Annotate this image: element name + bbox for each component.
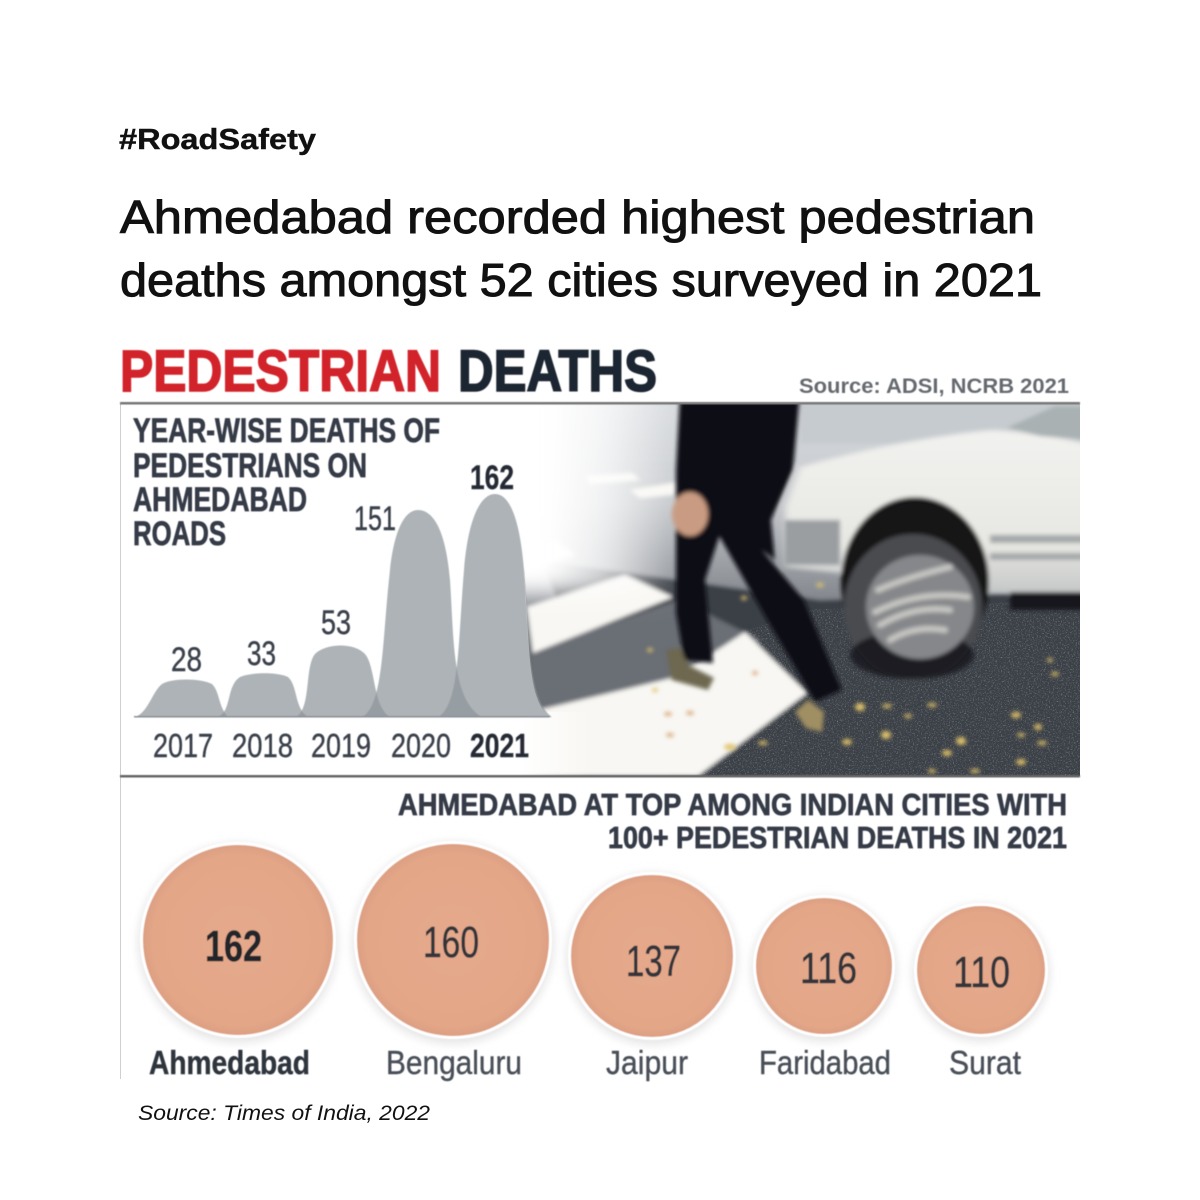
year labels: 2018 xyxy=(232,727,293,764)
white fade of lower stripe xyxy=(520,718,568,776)
city labels: Faridabad xyxy=(759,1044,891,1081)
circle: Faridabad: 116 xyxy=(800,944,857,993)
chart heading: AHMEDABAD xyxy=(133,481,307,519)
circle: Ahmedabad xyxy=(140,842,336,1038)
top rule xyxy=(120,402,1080,404)
circle: Surat: 110 xyxy=(953,948,1010,997)
circle: Jaipur xyxy=(568,872,736,1040)
bottom rule xyxy=(120,775,1080,778)
title xyxy=(120,191,1042,306)
city labels xyxy=(149,1044,1021,1081)
hashtag: #RoadSafety xyxy=(119,124,316,156)
year labels: 2021 xyxy=(470,727,529,764)
cities heading xyxy=(398,787,1067,855)
city labels: Jaipur xyxy=(606,1044,688,1081)
circle: Surat xyxy=(914,903,1048,1037)
chart heading: YEAR-WISE DEATHS OF xyxy=(133,412,440,450)
circle halos xyxy=(139,843,1049,1044)
city labels: Bengaluru xyxy=(386,1044,522,1081)
circle: Jaipur: 137 xyxy=(626,937,681,986)
circle: Bengaluru xyxy=(354,841,552,1039)
chart baseline xyxy=(134,716,550,718)
hump 2018 xyxy=(218,673,308,717)
main heading xyxy=(120,339,657,404)
chart heading: PEDESTRIANS ON xyxy=(133,447,367,485)
photo: pedestrian and car xyxy=(524,404,1080,776)
road grain xyxy=(680,600,1080,776)
value labels: 33 xyxy=(247,635,276,673)
year labels: 2017 xyxy=(153,727,213,764)
year labels: 2019 xyxy=(311,727,371,764)
value labels: 53 xyxy=(321,604,351,642)
hump 2020 xyxy=(362,510,482,717)
title: deaths amongst 52 cities surveyed in 2021 xyxy=(120,254,1042,306)
spokes xyxy=(875,567,968,640)
car underside shadow xyxy=(1010,592,1090,610)
wheel arch xyxy=(838,494,992,617)
city labels: Ahmedabad xyxy=(149,1044,310,1081)
value labels: 28 xyxy=(171,641,202,679)
chart heading: ROADS xyxy=(133,515,226,553)
circle: Ahmedabad: 162 xyxy=(205,922,262,971)
car windshield xyxy=(1010,405,1080,440)
hump chart xyxy=(134,494,552,718)
value labels: 151 xyxy=(354,500,396,538)
left shoe xyxy=(666,648,714,690)
main heading: DEATHS xyxy=(458,339,657,404)
crosswalk stripes xyxy=(510,473,807,776)
person torso and legs xyxy=(676,394,842,702)
left edge line xyxy=(120,404,121,1079)
value labels xyxy=(171,459,514,679)
hump 2017 xyxy=(135,680,228,717)
cities heading: AHMEDABAD AT TOP AMONG INDIAN CITIES WITH xyxy=(398,787,1067,822)
city labels: Surat xyxy=(949,1044,1021,1081)
infographic image panel xyxy=(120,339,1090,1081)
title: Ahmedabad recorded highest pedestrian xyxy=(120,191,1035,243)
cities heading: 100+ PEDESTRIAN DEATHS IN 2021 xyxy=(608,820,1067,855)
white fade of photo xyxy=(520,404,675,608)
car body xyxy=(785,430,1090,595)
circle: Bengaluru: 160 xyxy=(423,918,479,967)
hump 2021 xyxy=(438,494,552,717)
year labels xyxy=(153,727,529,764)
hand xyxy=(672,492,708,536)
year labels: 2020 xyxy=(391,727,451,764)
right shoe xyxy=(795,700,824,732)
car sill xyxy=(785,520,1090,565)
value labels: 162 xyxy=(470,459,514,497)
image source: Source: ADSI, NCRB 2021 xyxy=(799,375,1069,398)
hump 2019 xyxy=(296,645,390,717)
source note: Source: Times of India, 2022 xyxy=(138,1102,430,1125)
hub xyxy=(866,555,974,659)
circle: Faridabad xyxy=(753,895,895,1037)
chart heading xyxy=(133,412,440,553)
text and charts xyxy=(120,339,1080,1081)
main heading: PEDESTRIAN xyxy=(120,339,441,404)
leaves xyxy=(647,583,1059,773)
wheel shadow xyxy=(850,631,974,679)
tire xyxy=(844,534,982,680)
